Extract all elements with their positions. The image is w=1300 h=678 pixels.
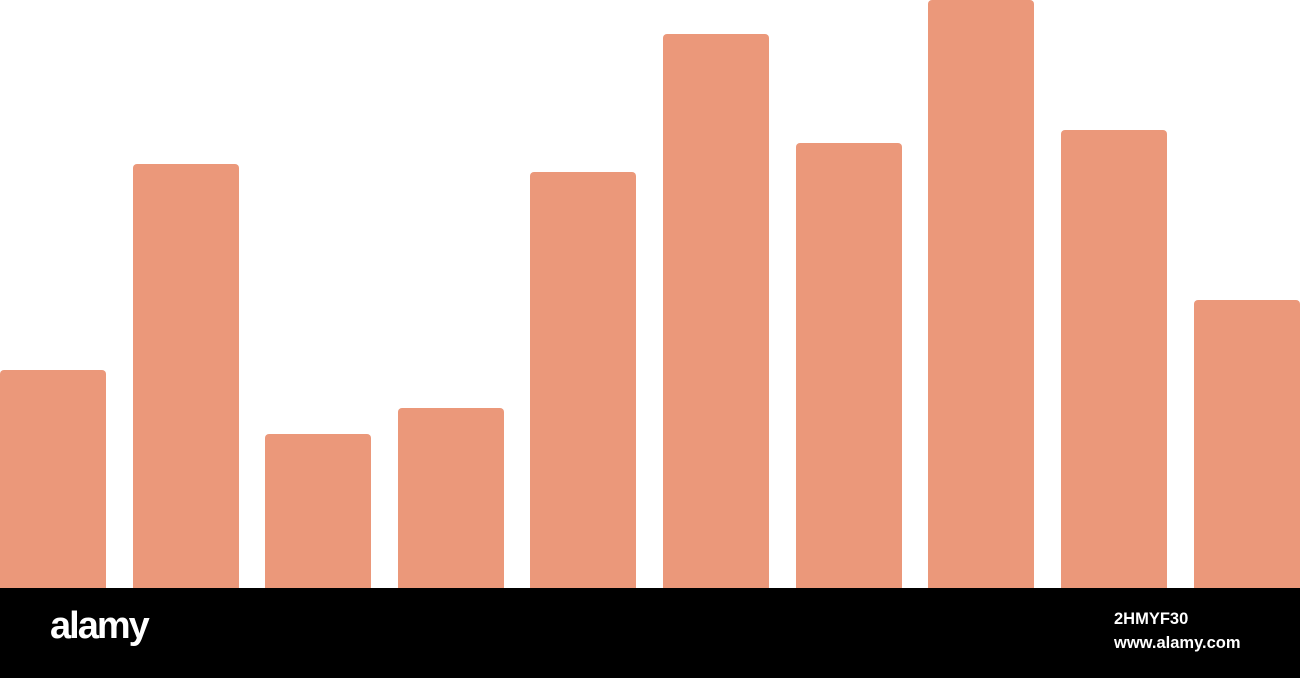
image id: 2HMYF30	[1114, 610, 1188, 628]
bar 1	[0, 370, 106, 588]
bar 9	[1061, 130, 1167, 588]
bar 8	[928, 0, 1034, 588]
bar 7	[796, 143, 902, 588]
website: www.alamy.com	[1114, 634, 1241, 652]
footer band	[0, 588, 1300, 678]
bar 10	[1194, 300, 1300, 588]
bar 6	[663, 34, 769, 588]
bar 3	[265, 434, 371, 588]
bar 2	[133, 164, 239, 588]
logo text: alamy	[50, 605, 148, 647]
bar 4	[398, 408, 504, 588]
bar 5	[530, 172, 636, 588]
